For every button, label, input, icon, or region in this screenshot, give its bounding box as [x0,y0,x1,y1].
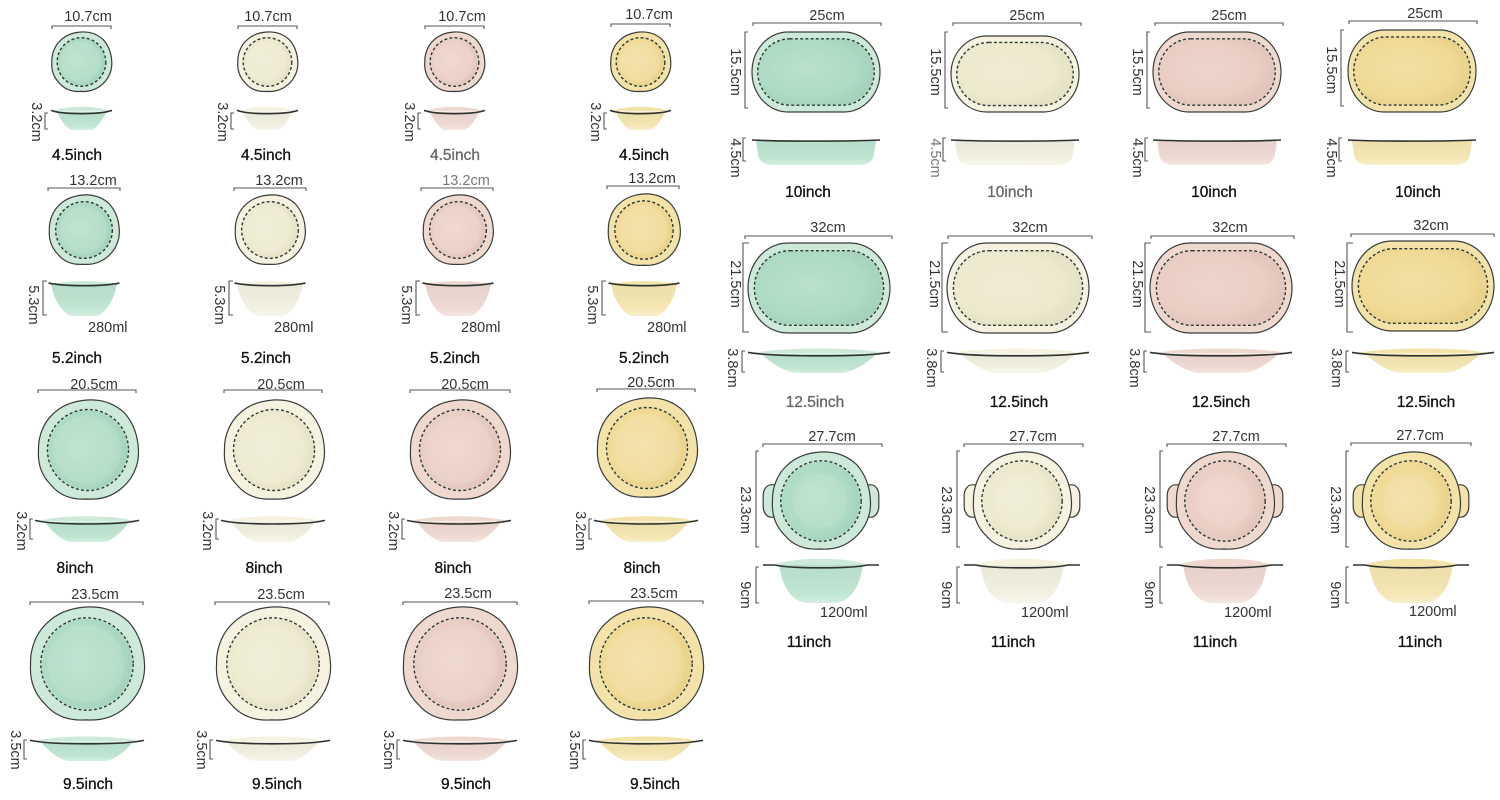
item: green 11inch bowl: 9cm [737,581,753,609]
item: green 9.5inch plate [7,587,145,793]
row: 12.5 inch oval platters [724,218,1494,411]
item: green 4.5inch bowl [28,9,112,164]
item: pink 11inch bowl: 1200ml [1224,605,1272,621]
item: cream 11inch bowl: 23.3cm [938,486,954,534]
item: pink 9.5inch plate: 9.5inch [441,776,491,793]
item: green 11inch bowl: 1200ml [820,605,868,621]
item: yellow 10inch dish [1323,6,1477,201]
item: cream 12.5inch platter [923,220,1092,411]
item: yellow 10inch dish: 25cm [1407,6,1443,22]
item: pink 4.5inch bowl: 10.7cm [438,9,486,25]
item: pink 5.2inch bowl: 5.2inch [430,350,480,367]
item: pink 4.5inch bowl: 3.2cm [401,102,417,142]
item: green 10inch dish: 4.5cm [727,138,743,178]
item: pink 12.5inch platter: 12.5inch [1192,394,1250,411]
item: yellow 5.2inch bowl: 280ml [647,320,686,336]
item: cream 12.5inch platter: 32cm [1012,220,1048,236]
item: cream 10inch dish: 25cm [1009,8,1045,24]
item: pink 12.5inch platter: 32cm [1212,220,1248,236]
item: cream 10inch dish: 10inch [987,184,1033,201]
item: yellow 10inch dish: 4.5cm [1323,138,1339,178]
item: pink 11inch bowl [1141,429,1286,651]
item: green 4.5inch bowl: 10.7cm [64,9,112,25]
item: green 5.2inch bowl: 13.2cm [69,173,117,189]
item: yellow 8inch plate: 8inch [623,560,661,577]
item: yellow 9.5inch plate: 9.5inch [630,776,680,793]
item: green 11inch bowl: 27.7cm [808,429,856,445]
item: pink 10inch dish: 15.5cm [1129,48,1145,96]
item: yellow 10inch dish: 10inch [1395,184,1441,201]
row: 4.5 inch bowls [28,7,673,164]
item: yellow 12.5inch platter: 12.5inch [1397,394,1455,411]
item: yellow 9.5inch plate: 23.5cm [630,586,678,602]
item: green 11inch bowl: 23.3cm [737,486,753,534]
item: yellow 4.5inch bowl: 4.5inch [619,147,669,164]
item: pink 12.5inch platter: 3.8cm [1126,348,1142,388]
item: green 11inch bowl: 11inch [787,634,831,651]
item: green 5.2inch bowl [25,173,128,367]
item: cream 11inch bowl [938,429,1083,651]
item: cream 4.5inch bowl: 4.5inch [241,147,291,164]
item: yellow 11inch bowl: 9cm [1327,581,1343,609]
row: 8 inch plates [13,375,698,577]
item: cream 9.5inch plate: 23.5cm [257,587,305,603]
item: green 9.5inch plate: 3.5cm [7,730,23,770]
item: yellow 8inch plate: 3.2cm [572,511,588,551]
item: cream 8inch plate: 20.5cm [257,377,305,393]
item: cream 5.2inch bowl [211,173,314,367]
item: yellow 4.5inch bowl: 10.7cm [625,7,673,23]
item: green 12.5inch platter: 21.5cm [727,260,743,308]
item: yellow 12.5inch platter: 32cm [1413,218,1449,234]
item: yellow 12.5inch platter: 21.5cm [1331,260,1347,308]
item: pink 5.2inch bowl: 280ml [461,320,500,336]
item: pink 10inch dish: 10inch [1191,184,1237,201]
item: cream 8inch plate [199,377,325,577]
item: yellow 4.5inch bowl: 3.2cm [587,102,603,142]
item: green 9.5inch plate: 23.5cm [71,587,119,603]
item: yellow 8inch plate [572,375,698,577]
item: yellow 5.2inch bowl: 5.2inch [619,350,669,367]
item: pink 5.2inch bowl: 5.3cm [398,285,414,325]
item: pink 8inch plate: 20.5cm [441,377,489,393]
item: pink 9.5inch plate [380,586,518,793]
item: cream 9.5inch plate [193,587,331,793]
item: cream 9.5inch plate: 9.5inch [252,776,302,793]
item: cream 11inch bowl: 27.7cm [1009,429,1057,445]
item: pink 11inch bowl: 27.7cm [1212,429,1260,445]
item: green 12.5inch platter: 32cm [810,220,846,236]
item: green 8inch plate: 8inch [56,560,94,577]
item: pink 8inch plate [385,377,511,577]
item: pink 5.2inch bowl [398,173,500,367]
item: cream 5.2inch bowl: 5.3cm [211,285,227,325]
item: yellow 5.2inch bowl [584,171,686,367]
item: cream 12.5inch platter: 21.5cm [926,260,942,308]
item: green 12.5inch platter: 12.5inch [786,394,844,411]
item: cream 5.2inch bowl: 5.2inch [241,350,291,367]
item: pink 10inch dish: 4.5cm [1129,138,1145,178]
item: green 4.5inch bowl: 4.5inch [52,147,102,164]
item: cream 12.5inch platter: 12.5inch [990,394,1048,411]
item: cream 5.2inch bowl: 13.2cm [255,173,303,189]
item: cream 8inch plate: 8inch [245,560,283,577]
item: yellow 12.5inch platter [1328,218,1494,411]
item: pink 11inch bowl: 9cm [1141,581,1157,609]
item: green 12.5inch platter [724,220,892,411]
item: yellow 12.5inch platter: 3.8cm [1328,348,1344,388]
item: yellow 9.5inch plate: 3.5cm [566,730,582,770]
item: cream 10inch dish: 4.5cm [927,138,943,178]
item: green 5.2inch bowl: 5.2inch [52,350,102,367]
item: green 8inch plate: 3.2cm [13,511,29,551]
item: yellow 11inch bowl [1327,428,1471,651]
item: cream 11inch bowl: 1200ml [1021,605,1069,621]
item: green 10inch dish: 25cm [809,8,845,24]
item: yellow 8inch plate: 20.5cm [627,375,675,391]
item: green 10inch dish: 10inch [785,184,831,201]
item: yellow 5.2inch bowl: 13.2cm [628,171,676,187]
item: yellow 5.2inch bowl: 5.3cm [584,285,600,325]
item: yellow 9.5inch plate [566,586,704,793]
item: yellow 4.5inch bowl [587,7,673,164]
item: yellow 11inch bowl: 1200ml [1409,604,1457,620]
row: 5.2 inch bowls [25,171,686,367]
item: yellow 11inch bowl: 11inch [1398,634,1442,651]
item: green 5.2inch bowl: 5.3cm [25,285,41,325]
row: 9.5 inch plates [7,586,704,793]
item: pink 10inch dish [1129,8,1283,201]
item: cream 10inch dish: 15.5cm [927,48,943,96]
item: pink 4.5inch bowl [401,9,486,164]
item: cream 4.5inch bowl: 3.2cm [214,102,230,142]
item: pink 9.5inch plate: 3.5cm [380,730,396,770]
item: cream 5.2inch bowl: 280ml [274,320,314,336]
row: 11 inch two-handled bowls [737,428,1471,651]
item: cream 11inch bowl: 11inch [991,634,1035,651]
item: cream 12.5inch platter: 3.8cm [923,348,939,388]
item: cream 8inch plate: 3.2cm [199,511,215,551]
item: yellow 11inch bowl: 23.3cm [1327,486,1343,534]
item: cream 4.5inch bowl: 10.7cm [244,9,292,25]
item: pink 8inch plate: 3.2cm [385,511,401,551]
item: pink 10inch dish: 25cm [1211,8,1247,24]
item: yellow 10inch dish: 15.5cm [1323,46,1339,94]
item: pink 8inch plate: 8inch [434,560,472,577]
row: 10 inch oval dishes [727,6,1477,201]
item: green 9.5inch plate: 9.5inch [63,776,113,793]
item: green 10inch dish [727,8,881,201]
item: green 4.5inch bowl: 3.2cm [28,102,44,142]
item: cream 9.5inch plate: 3.5cm [193,730,209,770]
item: green 10inch dish: 15.5cm [727,48,743,96]
item: pink 11inch bowl: 23.3cm [1141,486,1157,534]
item: cream 10inch dish [927,8,1081,201]
item: cream 11inch bowl: 9cm [938,581,954,609]
item: pink 5.2inch bowl: 13.2cm [442,173,490,189]
item: cream 4.5inch bowl [214,9,298,164]
item: pink 11inch bowl: 11inch [1193,634,1237,651]
item: green 11inch bowl [737,429,882,651]
item: pink 12.5inch platter: 21.5cm [1129,260,1145,308]
item: green 8inch plate [13,377,139,577]
item: pink 9.5inch plate: 23.5cm [444,586,492,602]
item: pink 12.5inch platter [1126,220,1294,411]
item: yellow 11inch bowl: 27.7cm [1396,428,1444,444]
item: green 12.5inch platter: 3.8cm [724,348,740,388]
item: pink 4.5inch bowl: 4.5inch [430,147,480,164]
item: green 5.2inch bowl: 280ml [88,320,128,336]
item: green 8inch plate: 20.5cm [70,377,118,393]
